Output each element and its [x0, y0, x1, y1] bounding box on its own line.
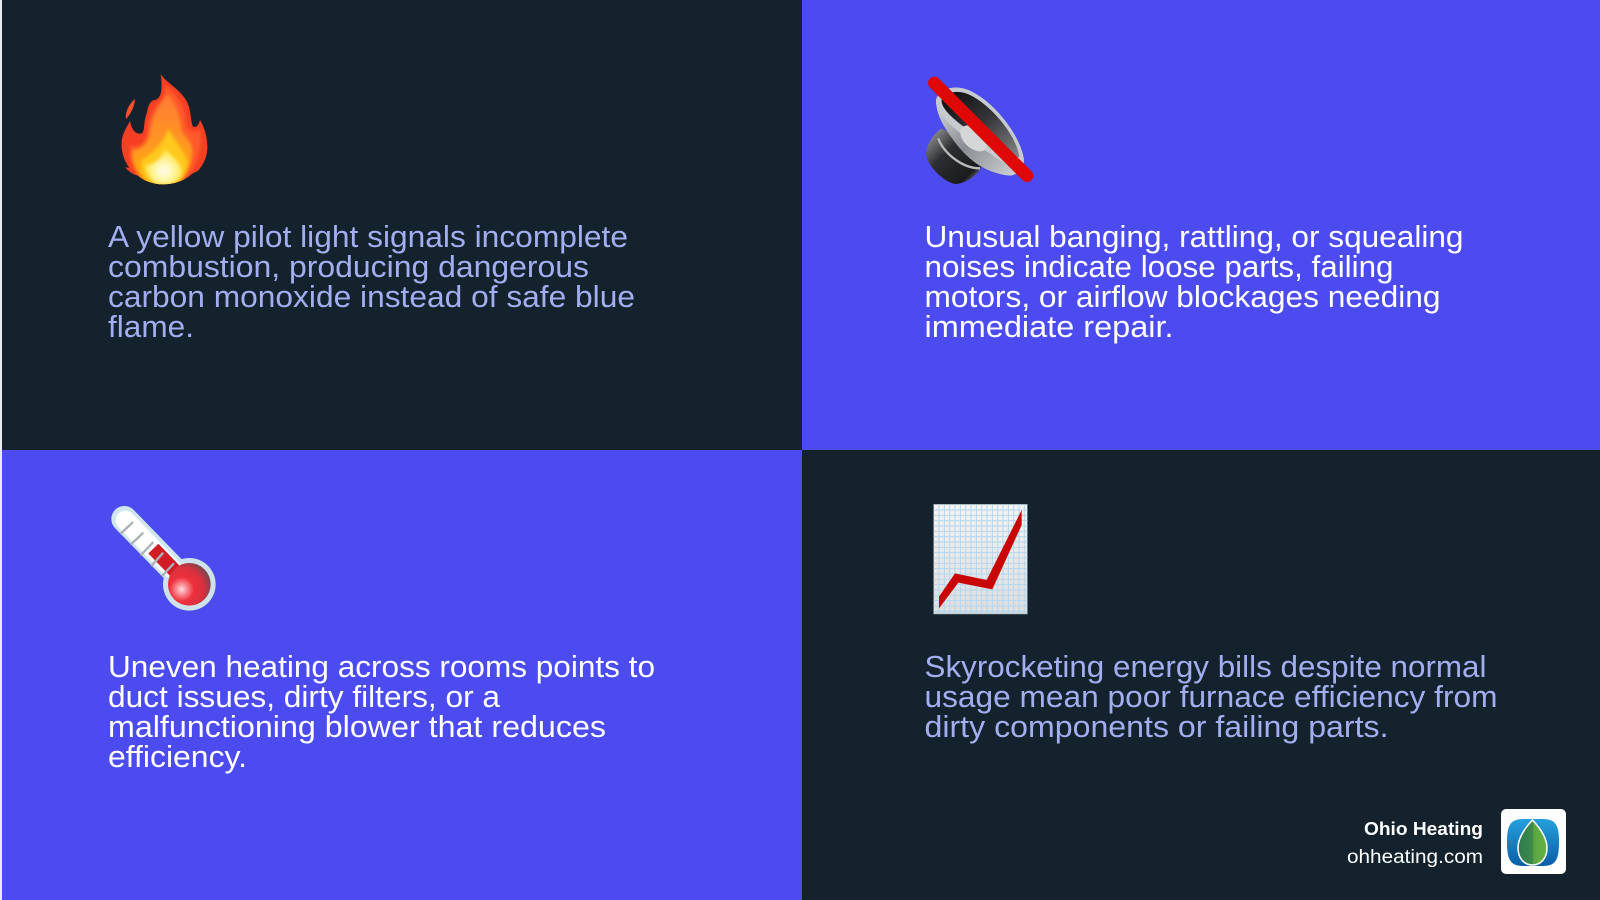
icon: thermometer — [121, 519, 216, 611]
icon: rising chart — [934, 504, 1027, 614]
panel: unusual noises — [802, 0, 1600, 450]
text: uneven heating description: malfunctioning blower that reduces — [108, 710, 606, 744]
text: pilot light description: A yellow pilot light signals incomplete — [108, 220, 628, 254]
text: noises description: immediate repair. — [924, 310, 1174, 344]
panel: energy bills — [802, 450, 1600, 900]
text: energy bills description: Skyrocketing energy bills despite normal — [924, 650, 1486, 684]
panel: yellow pilot light — [0, 0, 634, 450]
brand url: ohheating.com — [1347, 846, 1483, 868]
text: uneven heating description: Uneven heating across rooms points to — [108, 650, 655, 684]
text: pilot light description: flame. — [108, 310, 194, 344]
logo — [1501, 809, 1566, 874]
text: uneven heating description: duct issues, dirty filters, or a — [108, 680, 500, 714]
text: pilot light description: combustion, producing dangerous — [108, 250, 589, 284]
text: pilot light description: carbon monoxide instead of safe blue — [108, 280, 635, 314]
text: noises description: Unusual banging, rattling, or squealing — [924, 220, 1464, 254]
text: noises description: motors, or airflow blockages needing — [924, 280, 1440, 314]
icon: fire — [122, 74, 207, 185]
footer brand — [1347, 809, 1566, 874]
text: uneven heating description: efficiency. — [108, 740, 247, 774]
text: energy bills description: usage mean poor furnace efficiency from — [924, 680, 1498, 714]
text: noises description: noises indicate loose parts, failing — [924, 250, 1394, 284]
panel: uneven heating — [0, 450, 802, 900]
brand name: Ohio Heating — [1364, 818, 1483, 839]
text: energy bills description: dirty components or failing parts. — [924, 710, 1388, 744]
icon: muted speaker — [926, 83, 1027, 184]
